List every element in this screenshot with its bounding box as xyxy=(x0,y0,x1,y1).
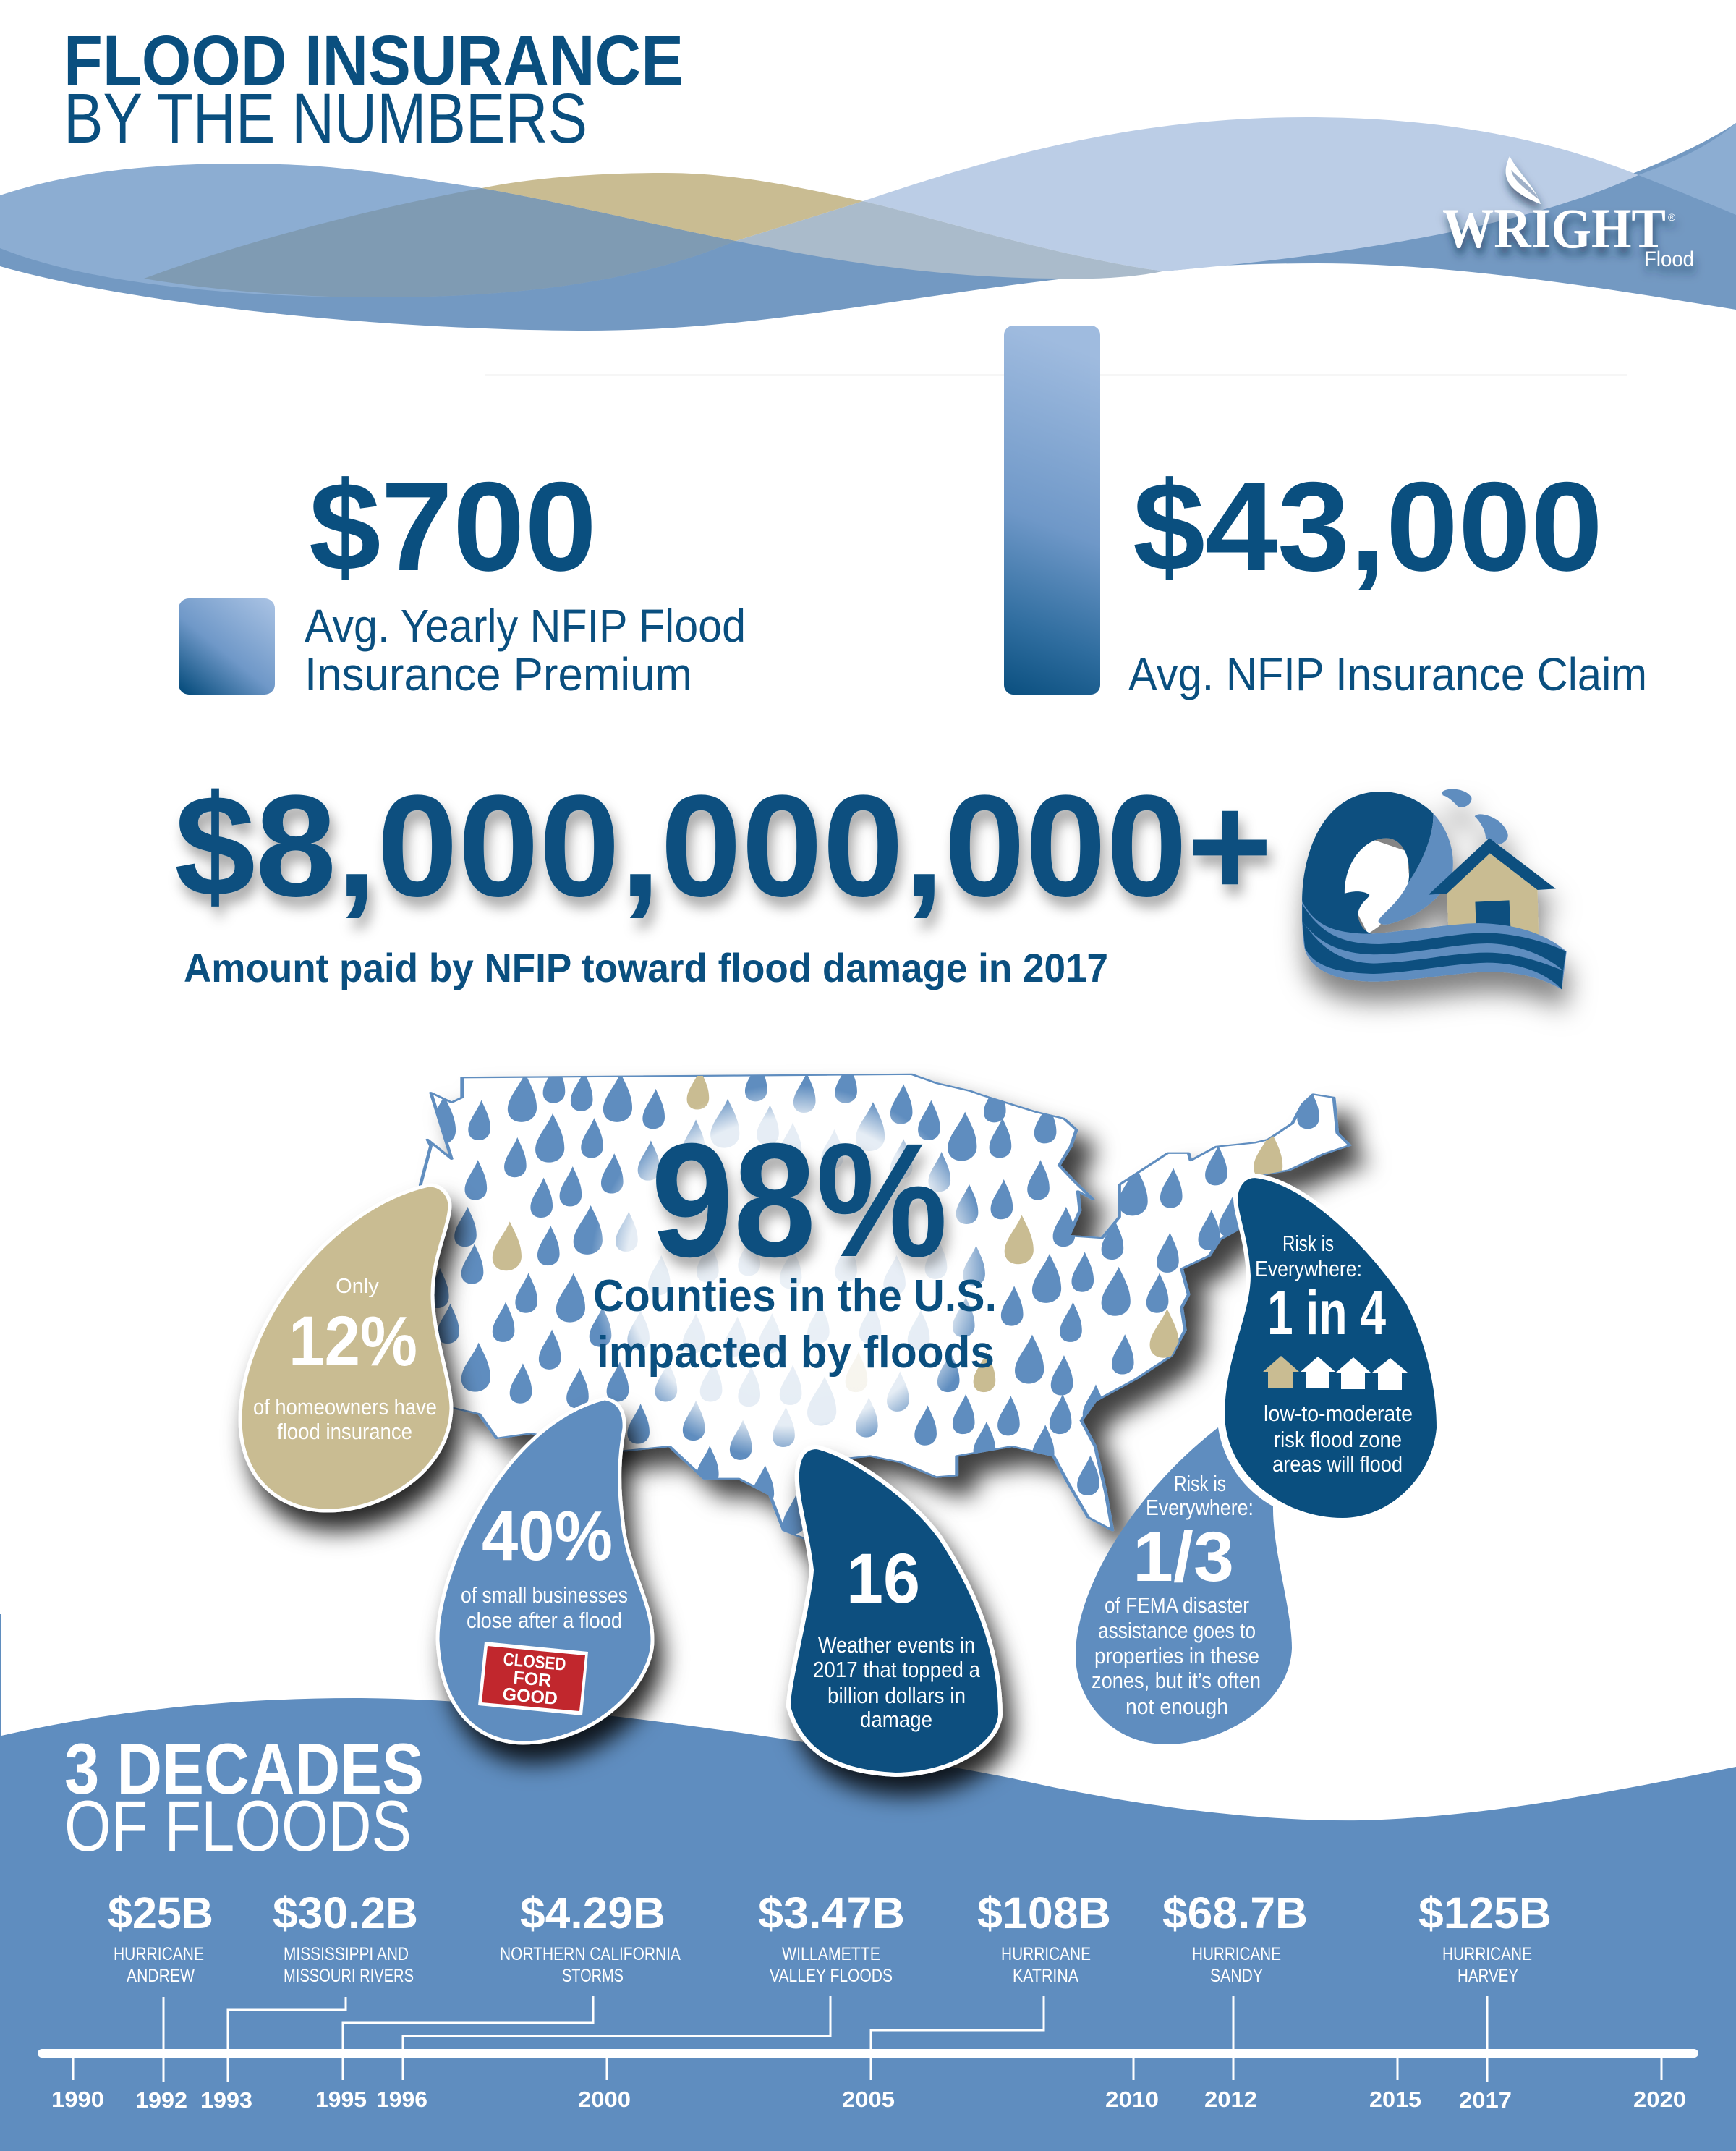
header waves xyxy=(0,117,1736,331)
timeline: 2015 xyxy=(1369,2087,1421,2112)
drop: 12 percent xyxy=(240,1185,451,1511)
drop: one in four: Everywhere: xyxy=(1255,1256,1362,1281)
event amounts and names: STORMS xyxy=(562,1966,624,1986)
event amounts and names xyxy=(108,1888,1552,1986)
panel: average premium: Avg. Yearly NFIP Flood xyxy=(305,600,746,652)
logo: Wright Flood: WRIGHT xyxy=(1442,197,1666,260)
event amounts and names: $68.7B xyxy=(1162,1888,1308,1938)
sign: closed for good: GOOD xyxy=(502,1684,558,1709)
event amounts and names: MISSISSIPPI AND xyxy=(284,1944,409,1964)
big number: amount paid: Amount paid by NFIP toward flood damage in 2017 xyxy=(184,945,1108,990)
drop: one third: Everywhere: xyxy=(1146,1495,1254,1520)
timeline: 2020 xyxy=(1633,2087,1686,2112)
logo: Wright Flood xyxy=(1442,156,1694,271)
headline: 98 percent counties xyxy=(593,1110,997,1378)
event amounts and names: ANDREW xyxy=(127,1966,195,1986)
panel: average claim: $43,000 xyxy=(1133,457,1603,598)
drop: one in four: areas will flood xyxy=(1272,1451,1403,1477)
drop: 40 percent: of small businesses xyxy=(461,1582,628,1608)
drop: 12 percent: Only xyxy=(336,1275,379,1298)
drop: 12 percent: of homeowners have xyxy=(253,1394,437,1420)
sign: closed for good: FOR xyxy=(512,1668,552,1691)
event amounts and names: $25B xyxy=(108,1888,213,1938)
panel: average premium: Insurance Premium xyxy=(305,648,692,700)
timeline: 1990 xyxy=(51,2087,104,2112)
event amounts and names: $30.2B xyxy=(273,1888,418,1938)
event amounts and names: WILLAMETTE xyxy=(782,1944,880,1964)
headline: 98 percent counties: Counties in the U.S. xyxy=(593,1271,997,1321)
title: FLOOD INSURANCE xyxy=(64,21,684,100)
event amounts and names: KATRINA xyxy=(1013,1966,1078,1986)
icon: four houses xyxy=(1263,1356,1408,1390)
timeline: 2010 xyxy=(1105,2087,1159,2112)
sign: closed for good xyxy=(478,1642,588,1715)
event amounts and names: HARVEY xyxy=(1458,1966,1518,1986)
event amounts and names: HURRICANE xyxy=(1442,1944,1532,1964)
drop: one third: Risk is xyxy=(1174,1471,1226,1496)
drop: 16 weather events: 2017 that topped a xyxy=(813,1657,981,1682)
drop: 16 weather events xyxy=(788,1447,1000,1775)
timeline: 2000 xyxy=(578,2087,631,2112)
event amounts and names: $3.47B xyxy=(758,1888,905,1938)
heading: 3 decades of floods xyxy=(64,1728,424,1866)
drop: one third: 1/3 xyxy=(1133,1517,1234,1596)
event amounts and names: $108B xyxy=(977,1888,1111,1938)
drop: 40 percent xyxy=(438,1399,652,1743)
drop: 12 percent: flood insurance xyxy=(277,1419,412,1444)
timeline: 1996 xyxy=(376,2087,427,2112)
drop: one in four: low-to-moderate xyxy=(1264,1401,1413,1426)
drop: one in four: risk flood zone xyxy=(1274,1427,1402,1452)
bottom wave background xyxy=(0,1614,1736,2151)
timeline: 2005 xyxy=(842,2087,895,2112)
panel: average premium xyxy=(179,457,746,700)
drop: one third: of FEMA disaster xyxy=(1105,1592,1249,1618)
drop: one third: zones, but it’s often xyxy=(1092,1668,1261,1693)
timeline: 1995 xyxy=(315,2087,367,2112)
event amounts and names: HURRICANE xyxy=(114,1944,204,1964)
event amounts and names: $125B xyxy=(1418,1888,1552,1938)
drop: 16 weather events: 16 xyxy=(846,1539,920,1618)
event amounts and names: $4.29B xyxy=(520,1888,665,1938)
heading: 3 decades of floods: OF FLOODS xyxy=(64,1786,412,1866)
divider xyxy=(485,374,1628,376)
panel: average premium: $700 xyxy=(309,457,597,598)
event amounts and names: NORTHERN CALIFORNIA xyxy=(500,1944,681,1964)
event amounts and names: VALLEY FLOODS xyxy=(770,1966,893,1986)
title xyxy=(64,21,684,158)
icon: wave and house xyxy=(1302,789,1567,990)
drop: 16 weather events: billion dollars in xyxy=(827,1683,966,1708)
event amounts and names: SANDY xyxy=(1210,1966,1263,1986)
drop: one in four xyxy=(1222,1176,1439,1520)
drop: 40 percent: close after a flood xyxy=(467,1608,622,1633)
headline: 98 percent counties: 98% xyxy=(651,1110,948,1291)
sign: closed for good: CLOSED xyxy=(502,1649,567,1675)
big number: amount paid: $8,000,000,000+ xyxy=(174,765,1272,927)
timeline: 1992 xyxy=(135,2087,187,2113)
drop: one in four: Risk is xyxy=(1282,1231,1334,1256)
heading: 3 decades of floods: 3 DECADES xyxy=(64,1728,424,1809)
timeline: 2012 xyxy=(1204,2087,1257,2112)
title: BY THE NUMBERS xyxy=(64,79,587,158)
drop: one third xyxy=(1076,1427,1292,1744)
event amounts and names: MISSOURI RIVERS xyxy=(284,1966,414,1986)
timeline: 2017 xyxy=(1459,2087,1512,2113)
drop: one third: not enough xyxy=(1126,1694,1228,1719)
drop: 16 weather events: Weather events in xyxy=(818,1632,975,1658)
map of the United States with rain drops xyxy=(420,1061,1350,1540)
event amounts and names: HURRICANE xyxy=(1001,1944,1091,1964)
event amounts and names: HURRICANE xyxy=(1192,1944,1281,1964)
drop: one third: assistance goes to xyxy=(1098,1618,1256,1643)
timeline xyxy=(38,1996,1698,2113)
timeline: 1993 xyxy=(200,2087,252,2113)
drop: 16 weather events: damage xyxy=(860,1707,932,1732)
logo: Wright Flood: ® xyxy=(1668,211,1676,223)
panel: average claim xyxy=(1004,326,1647,700)
drop: one third: properties in these xyxy=(1094,1643,1259,1668)
logo: Wright Flood: Flood xyxy=(1644,247,1694,271)
drop: 40 percent: 40% xyxy=(482,1496,613,1575)
drop: 12 percent: 12% xyxy=(289,1302,417,1380)
drop: one in four: 1 in 4 xyxy=(1267,1278,1386,1348)
headline: 98 percent counties: impacted by floods xyxy=(597,1328,995,1378)
panel: average claim: Avg. NFIP Insurance Claim xyxy=(1128,648,1647,700)
